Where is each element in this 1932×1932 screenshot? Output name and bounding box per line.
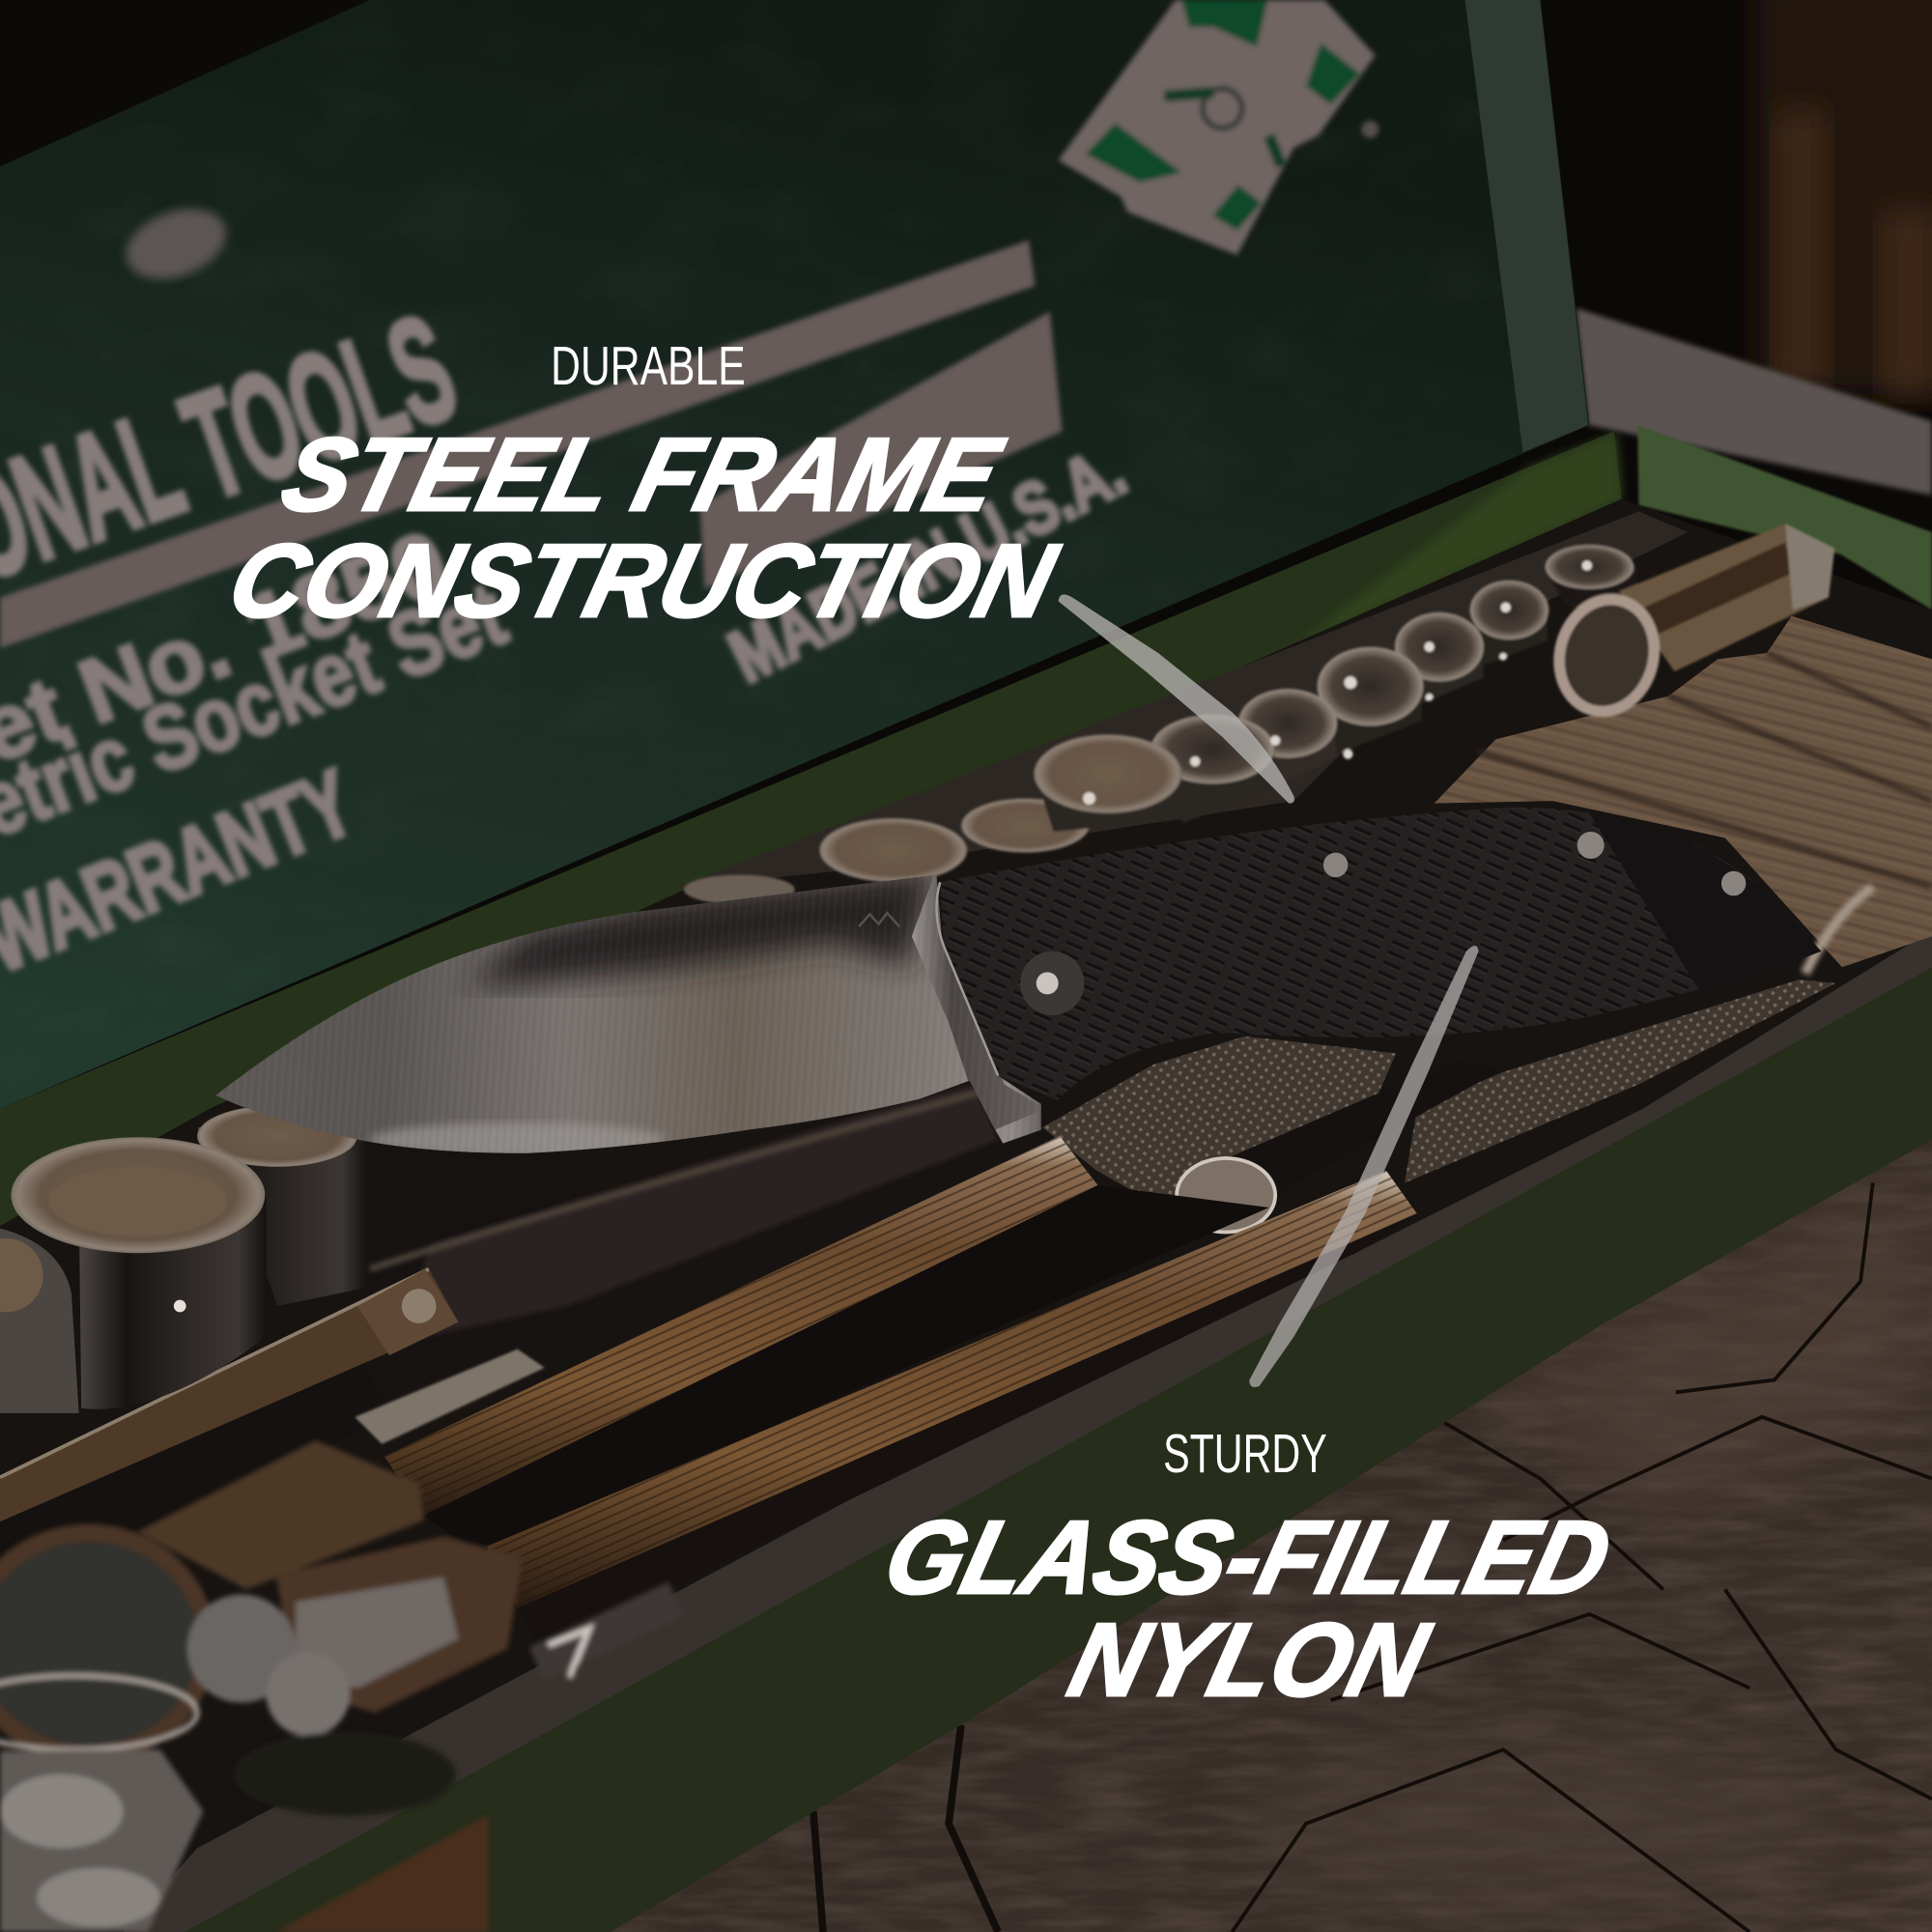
lid printed text bbox=[0, 282, 1138, 992]
heading: glass-filled nylon bbox=[874, 1501, 1621, 1719]
knife bbox=[215, 807, 1821, 1158]
scuff mark bbox=[117, 196, 236, 292]
heading: glass-filled nylon: NYLON bbox=[1059, 1604, 1439, 1719]
ratchet parts bbox=[0, 1440, 684, 1932]
socket tools in the tray bbox=[0, 980, 1836, 1932]
callout: sturdy glass-filled nylon bbox=[874, 1423, 1621, 1719]
arrow stroke: to knife handle bbox=[1249, 946, 1479, 1387]
arrow stroke: to knife frame bbox=[1059, 594, 1294, 804]
heading: glass-filled nylon: GLASS-FILLED bbox=[874, 1501, 1621, 1616]
sockets along the top row bbox=[684, 524, 1834, 904]
label: durable: DURABLE bbox=[551, 335, 746, 396]
callout: durable steel frame bbox=[218, 335, 1067, 639]
label: sturdy: STURDY bbox=[1163, 1423, 1327, 1484]
handle screws bbox=[1020, 832, 1746, 1015]
small silver socket bbox=[355, 1350, 545, 1444]
blade bbox=[215, 863, 1054, 1158]
handle bbox=[940, 807, 1821, 1100]
heading: steel frame construction bbox=[218, 418, 1067, 639]
wooden table surface bbox=[591, 1109, 1932, 1932]
chrome extension bars bbox=[384, 1136, 1097, 1516]
socket case tray bbox=[0, 425, 1932, 1932]
lid printed text: MADE IN U.S.A. bbox=[717, 430, 1138, 698]
socket case lid bbox=[0, 0, 1589, 1109]
lid logo bbox=[1059, 0, 1378, 255]
small extension bar bbox=[0, 1312, 394, 1589]
heading: steel frame construction: CONSTRUCTION bbox=[218, 524, 1067, 639]
bit handles at the right bbox=[1435, 616, 1932, 974]
blade logo mark bbox=[859, 913, 899, 926]
large sockets bbox=[0, 1105, 367, 1413]
lid printed bands bbox=[0, 241, 1062, 648]
heading: steel frame construction: STEEL FRAME bbox=[271, 418, 1013, 533]
knurled handle bbox=[1042, 1037, 1396, 1216]
